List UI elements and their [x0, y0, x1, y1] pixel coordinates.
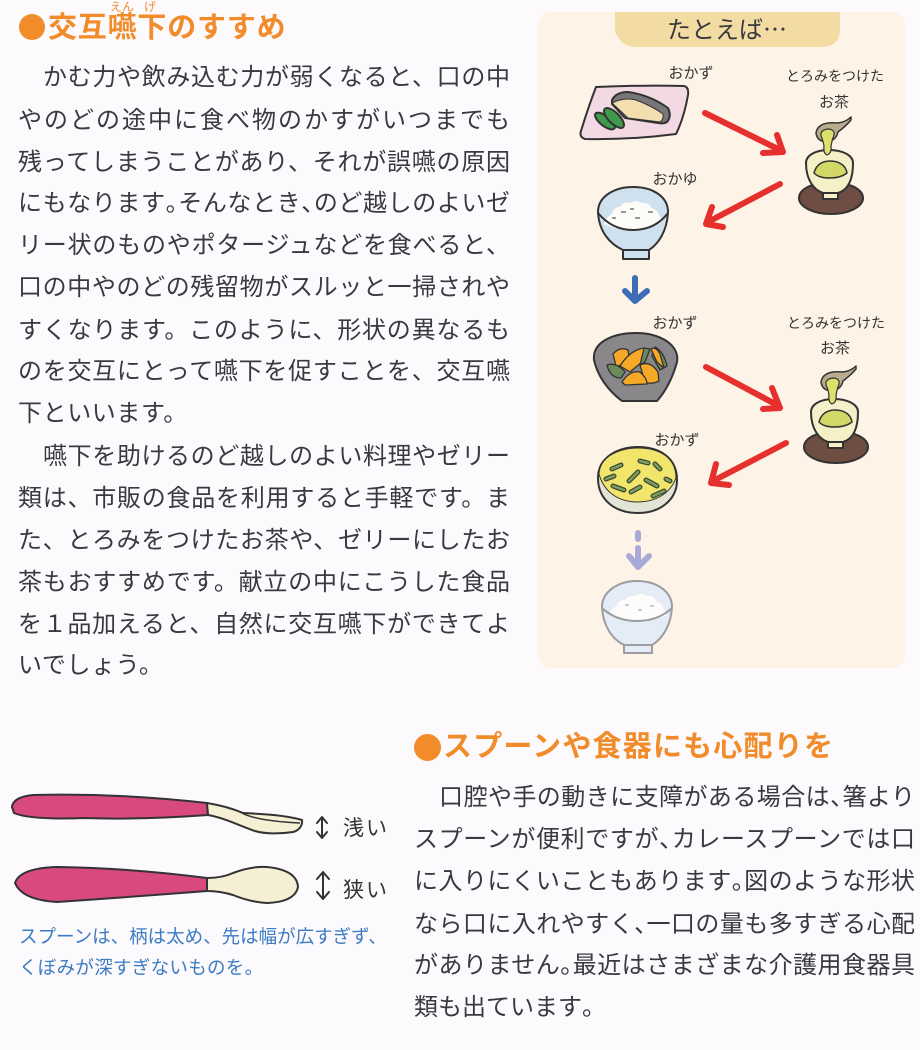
arrow: tea to vegetable dish [711, 443, 786, 485]
heading bullet [414, 734, 441, 761]
arrow: shallow depth [317, 817, 327, 838]
text block: spoon paragraph: がありません。最近はさまざまな介護用食器具 [414, 952, 915, 979]
heading text: 交互嚥下のすすめ [48, 12, 286, 44]
caption: spoon advice [19, 926, 387, 978]
text block: main paragraphs: かむ力や飲み込む力が弱くなると、口の中 [43, 64, 510, 91]
panel tab: たとえば: たとえば… [667, 10, 787, 45]
label: とろみをつけたお茶 second [787, 313, 885, 358]
heading text: スプーンや食器にも心配りを [443, 731, 834, 763]
icon: gray bowl of simmered pumpkin [594, 333, 677, 401]
text block: spoon paragraph: 類も出ています。 [414, 994, 594, 1021]
panel: example background [538, 12, 905, 668]
text block: spoon paragraph: スプーンが便利ですが、カレースプーンでは口 [414, 826, 915, 853]
label: 狭い: 狭い [343, 874, 389, 904]
text block: main paragraphs: 嚥下を助けるのど越しのよい料理やゼリー [43, 443, 510, 470]
label: おかず second: おかず [652, 312, 698, 333]
text block: main paragraphs: を１品加えると、自然に交互嚥下ができてよ [18, 611, 510, 638]
text block: main paragraphs: のを交互にとって嚥下を促すことを、交互嚥 [18, 358, 510, 385]
label: おかゆ: おかゆ [652, 168, 698, 189]
text block: main paragraphs: 類は、市販の食品を利用すると手軽です。ま [18, 485, 510, 512]
icon: rice porridge bowl [598, 187, 668, 259]
text block: spoon paragraph [414, 784, 915, 1021]
icon: tea cup with spoon second [804, 366, 868, 463]
arrow: blue down [625, 278, 647, 301]
icon: pale rice bowl [602, 581, 672, 653]
heading bullet [19, 14, 45, 40]
caption: spoon advice: スプーンは、柄は太め、先は幅が広すぎず、 [19, 926, 387, 947]
panel tab: たとえば [615, 10, 840, 47]
label: とろみをつけたお茶: とろみをつけた [786, 66, 884, 86]
label: とろみをつけたお茶 second: とろみをつけた [787, 313, 885, 333]
arrow: pale dashed down [629, 533, 649, 567]
text block: main paragraphs [18, 64, 510, 679]
text block: spoon paragraph: に入りにくいこともあります。図のような形状 [414, 868, 915, 895]
text block: main paragraphs: リー状のものやポタージュなどを食べると、 [18, 232, 510, 259]
label: とろみをつけたお茶: お茶 [819, 91, 849, 112]
text block: main paragraphs: にもなります。そんなとき、のど越しのよいゼ [18, 190, 510, 217]
arrow: pumpkin to tea [706, 367, 780, 409]
arrow: fish to tea [705, 113, 783, 153]
text block: main paragraphs: いでしょう。 [18, 652, 163, 679]
arrow: tea to rice porridge [706, 184, 780, 227]
text block: spoon paragraph: なら口に入れやすく、一口の量も多すぎる心配 [414, 911, 915, 938]
ruby: げ: げ [144, 0, 156, 14]
text block: main paragraphs: やのどの途中に食べ物のかすがいつまでも [18, 107, 510, 134]
text block: main paragraphs: 茶もおすすめです。献立の中にこうした食品 [18, 569, 510, 596]
heading: 交互嚥下のすすめ [19, 0, 286, 44]
ruby: えん: えん [110, 0, 134, 14]
text block: spoon paragraph: 口腔や手の動きに支障がある場合は、箸より [439, 784, 915, 811]
heading: スプーンや食器にも心配りを [414, 731, 834, 763]
icon: vegetable dish [598, 447, 677, 513]
text block: main paragraphs: た、とろみをつけたお茶や、ゼリーにしたお [18, 527, 510, 554]
label: おかず third: おかず [654, 429, 700, 450]
caption: spoon advice: くぼみが深すぎないものを。 [19, 957, 263, 978]
text block: main paragraphs: 残ってしまうことがあり、それが誤嚥の原因 [18, 149, 510, 176]
icon: narrow spoon top view [15, 867, 298, 903]
label: とろみをつけたお茶 second: お茶 [820, 337, 850, 358]
icon: shallow spoon side view [12, 795, 302, 833]
text block: main paragraphs: 下といいます。 [18, 400, 188, 427]
icon: fish side dish [580, 86, 688, 139]
label: とろみをつけたお茶 [786, 66, 884, 112]
label: 浅い: 浅い [343, 812, 389, 842]
arrow: narrow width [317, 872, 329, 899]
label: おかず: おかず [668, 62, 714, 83]
text block: main paragraphs: 口の中やのどの残留物がスルッと一掃されや [18, 274, 510, 301]
text block: main paragraphs: すくなります。このように、形状の異なるも [18, 317, 510, 344]
icon: tea cup with spoon [799, 117, 863, 214]
